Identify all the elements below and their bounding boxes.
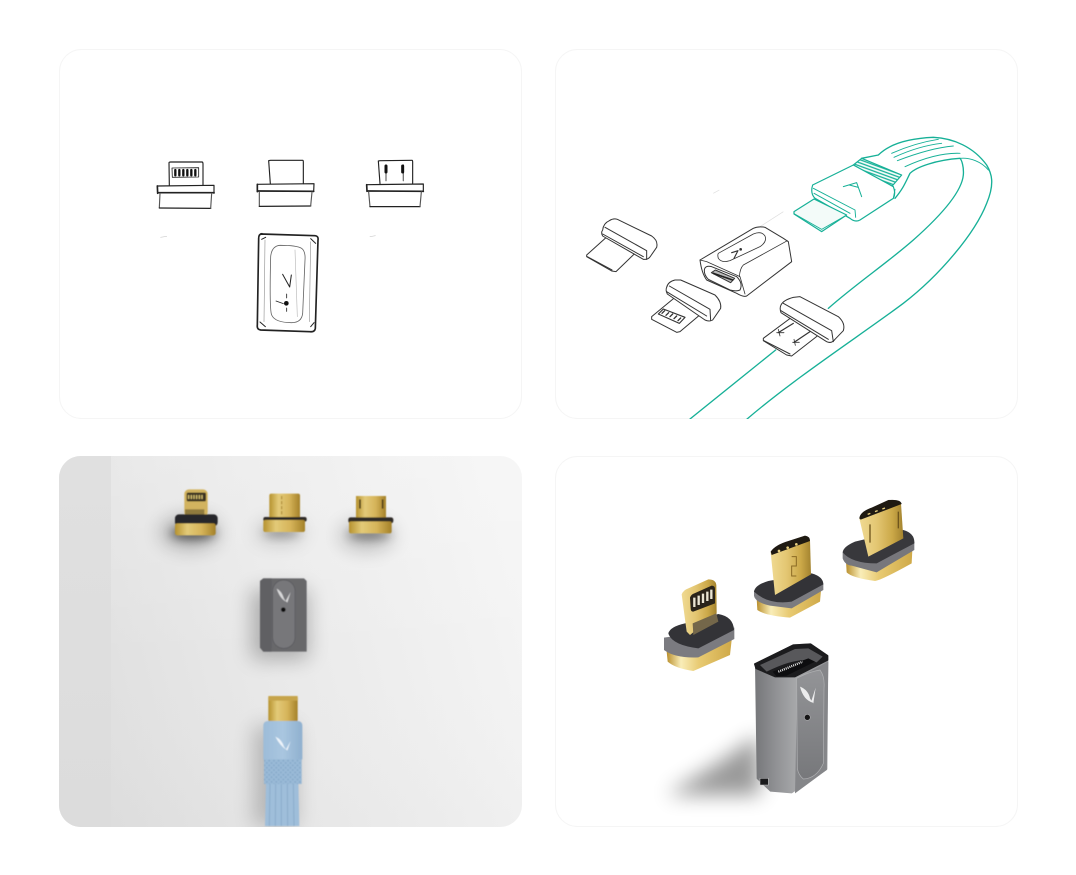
panel: perspective product render xyxy=(556,456,1018,826)
teal cable head with tip xyxy=(794,158,902,232)
teal flat cable xyxy=(690,137,992,419)
micro USB tip xyxy=(843,500,914,581)
sketch: USB-C connector xyxy=(257,160,314,206)
shadow under adapter xyxy=(667,735,760,795)
lightning tip xyxy=(175,489,218,535)
sketch: lightning connector xyxy=(157,162,214,208)
blue flat cable xyxy=(263,696,302,826)
shadows beneath parts xyxy=(162,518,393,826)
USB-C tip outline xyxy=(587,219,657,272)
lightning tip xyxy=(664,579,734,671)
adapter body xyxy=(260,578,307,652)
adapter body xyxy=(755,644,828,793)
panel: hand sketch of connectors xyxy=(60,50,522,418)
USB-C tip xyxy=(754,536,823,618)
main gadget outline xyxy=(700,227,792,296)
panel: top-down product render xyxy=(59,456,522,827)
micro USB tip outline xyxy=(763,297,844,356)
lightning tip outline xyxy=(652,280,721,332)
sketch: adapter body xyxy=(257,234,318,332)
panel: line drawing of cable and connectors xyxy=(556,50,1018,419)
faint construction lines xyxy=(713,190,783,227)
USB-C tip xyxy=(263,494,307,532)
micro USB tip xyxy=(348,496,393,533)
sketch: micro USB connector xyxy=(367,160,423,207)
